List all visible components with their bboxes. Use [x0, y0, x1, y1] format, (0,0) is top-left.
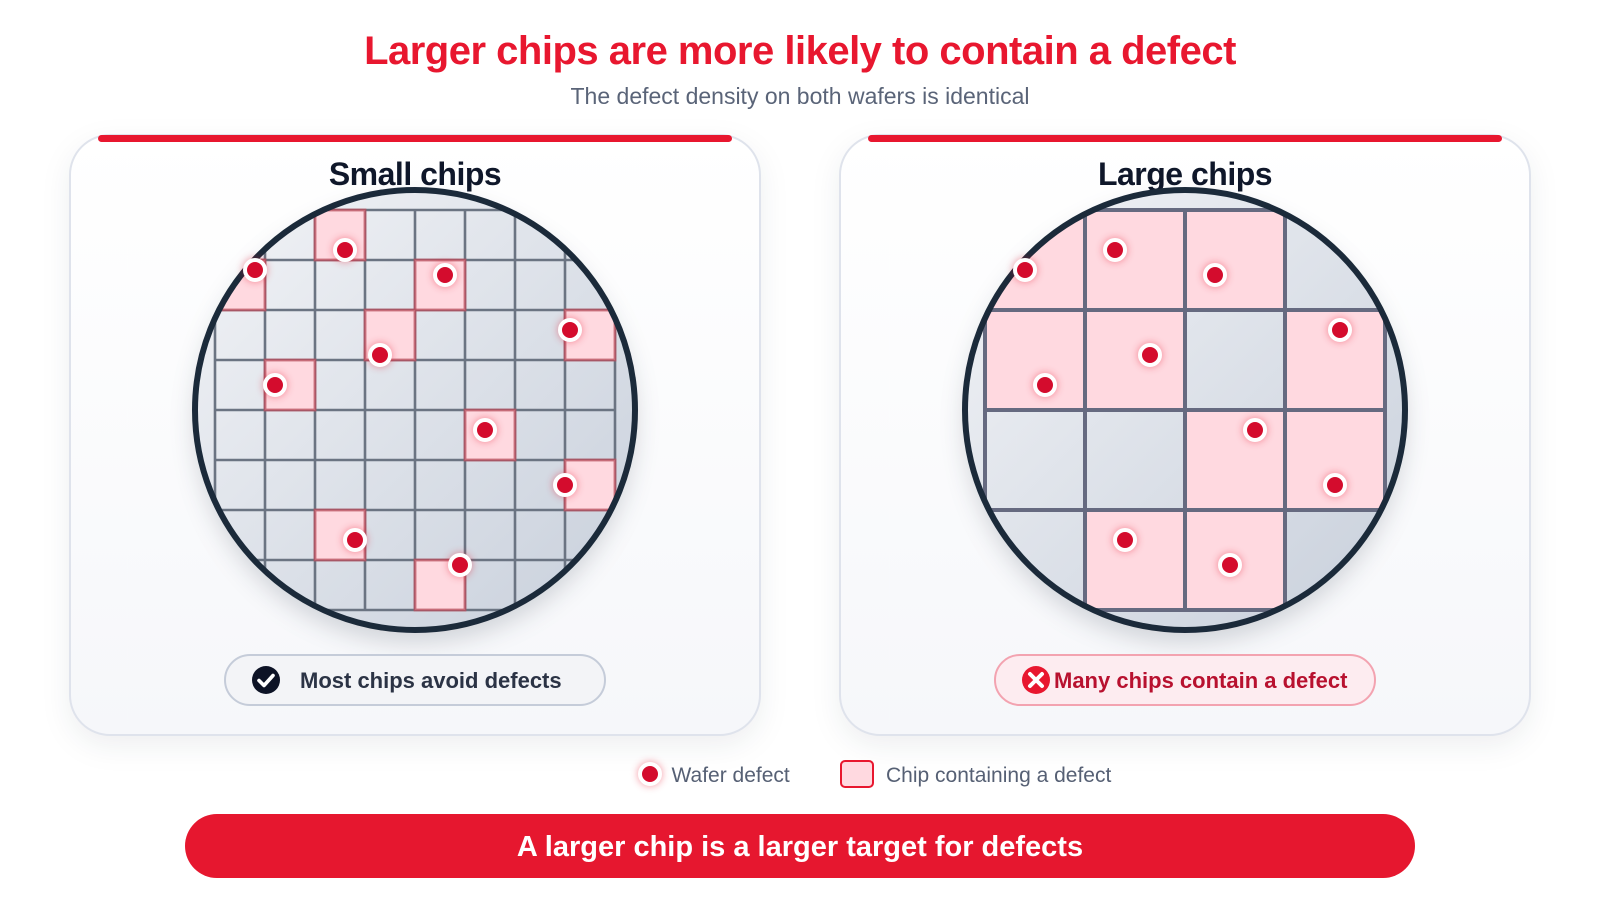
- chip grid: [985, 210, 1385, 610]
- panel: large chips: [840, 135, 1530, 735]
- defect dots: [245, 240, 580, 575]
- wafer: large chips: [964, 189, 1406, 631]
- chip grid: [215, 210, 615, 610]
- panel heading: Large chips: [1098, 156, 1272, 192]
- takeaway banner: [185, 814, 1415, 878]
- title: Larger chips are more likely to contain a defect: [364, 29, 1236, 73]
- legend: wafer defect: Wafer defect: [672, 764, 790, 787]
- wafer disc: [194, 189, 636, 631]
- panel accent bar: [98, 135, 732, 142]
- defect dots: [1015, 240, 1350, 575]
- wafer rim: [195, 190, 635, 630]
- pill text: Most chips avoid defects: [300, 668, 562, 693]
- pill text: Many chips contain a defect: [1054, 668, 1348, 693]
- subtitle: The defect density on both wafers is identical: [571, 83, 1029, 109]
- legend: [640, 761, 1111, 787]
- panel: small chips: [70, 135, 760, 735]
- wafer: small chips: [194, 189, 636, 631]
- legend: chip containing a defect: Chip containing a defect: [886, 764, 1111, 787]
- verdict pill: small chips: [225, 655, 605, 705]
- panel accent bar: [868, 135, 1502, 142]
- icon: cross: [1022, 666, 1050, 694]
- panel background: [70, 135, 760, 735]
- verdict pill: large chips: [995, 655, 1375, 705]
- icon: check: [252, 666, 280, 694]
- takeaway banner: A larger chip is a larger target for defects: [517, 831, 1083, 863]
- wafer rim: [965, 190, 1405, 630]
- panel background: [840, 135, 1530, 735]
- panel heading: Small chips: [329, 156, 501, 192]
- wafer disc: [964, 189, 1406, 631]
